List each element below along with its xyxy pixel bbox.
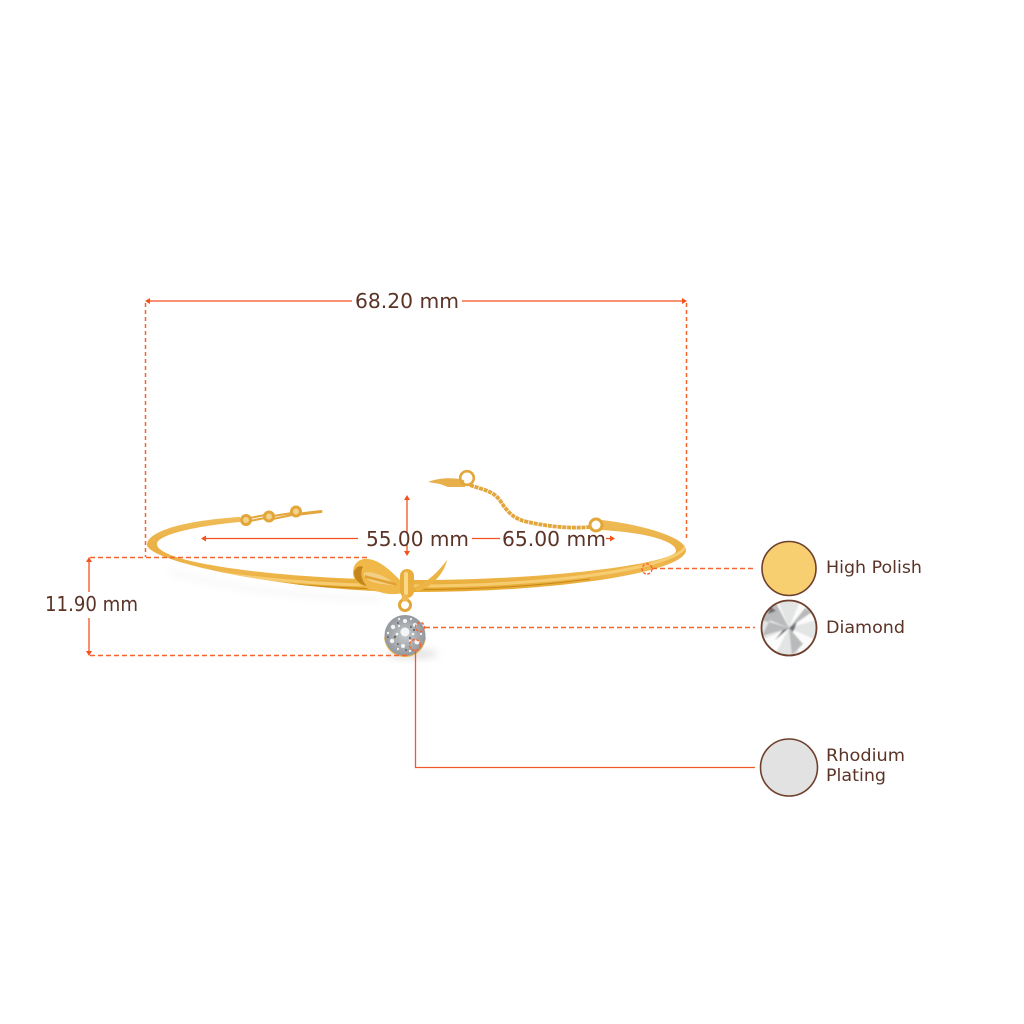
clasp — [428, 478, 465, 487]
leader: diamond — [416, 622, 755, 632]
leader: high polish — [642, 564, 754, 574]
dimension: 68.20 mm — [145, 289, 687, 557]
end ring — [590, 519, 602, 531]
bow knot — [400, 569, 414, 598]
bow loop — [353, 559, 402, 594]
bangle shading — [216, 546, 686, 590]
cable chain — [470, 485, 590, 528]
leader: rhodium plating — [410, 640, 755, 768]
label: high polish: High Polish — [826, 558, 922, 577]
diamond pendant — [384, 615, 438, 659]
bow — [353, 559, 447, 610]
swatch: diamond — [762, 600, 905, 656]
bow shade — [354, 566, 367, 586]
bow loop opening — [364, 572, 397, 586]
bangle tube — [147, 517, 686, 592]
dimension: 11.90 mm: 11.90 mm — [45, 592, 138, 616]
dimension: 11.90 mm — [45, 557, 410, 656]
bow tail — [412, 560, 447, 592]
label: rhodium plating: Plating — [826, 766, 886, 785]
dimension: 55.00 mm: 55.00 mm — [366, 527, 469, 551]
dimension: 68.20 mm: 68.20 mm — [355, 289, 459, 313]
right chain and clasp — [428, 471, 602, 531]
left chain — [242, 507, 321, 524]
dimension: 55.00 mm — [201, 495, 469, 556]
pendant shadow — [386, 649, 438, 659]
swatch: high polish — [762, 542, 922, 596]
bow tube through loop — [365, 575, 397, 586]
label: rhodium plating: Rhodium — [826, 746, 905, 765]
bangle — [147, 517, 686, 599]
pendant bail — [400, 600, 410, 610]
bangle shadow — [170, 572, 380, 599]
pendant rim — [384, 637, 426, 657]
dimension: 65.00 mm: 65.00 mm — [502, 527, 606, 551]
swatch: rhodium plating — [760, 739, 905, 796]
label: diamond: Diamond — [826, 618, 905, 637]
